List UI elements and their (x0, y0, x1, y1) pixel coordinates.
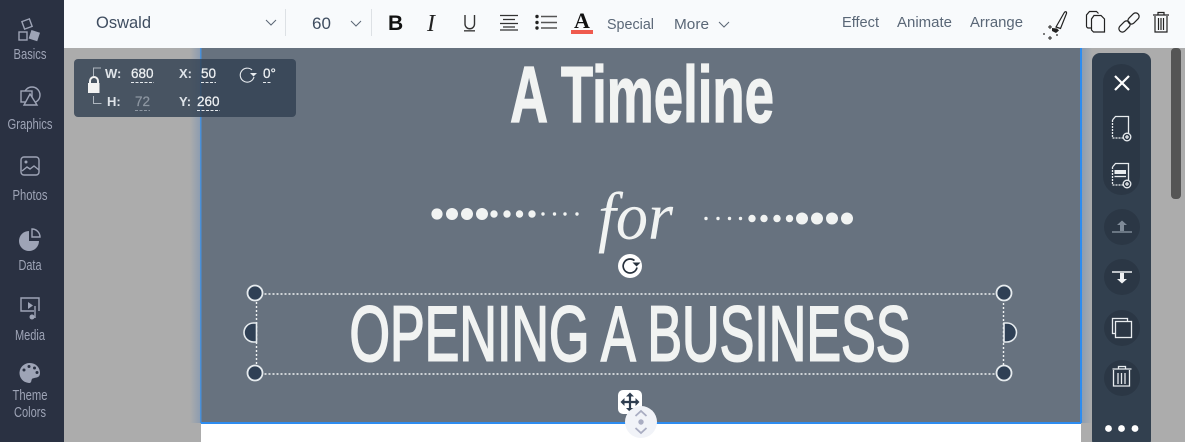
font size selector: 60 (312, 14, 331, 33)
button: move down (1104, 259, 1140, 295)
button: duplicate (1104, 310, 1140, 346)
text colour button (571, 8, 593, 34)
sidebar item: Photos (12, 157, 48, 204)
lock icon (88, 68, 102, 104)
font selector: Oswald (96, 13, 151, 32)
move handle (618, 390, 642, 414)
sidebar item: Data (18, 229, 42, 274)
text colour button: A (574, 8, 590, 33)
underline button (464, 15, 475, 32)
icon: trash (1153, 12, 1169, 32)
align centre button (500, 16, 518, 30)
more menu: More (674, 17, 709, 33)
top toolbar (64, 0, 1185, 48)
size and position readout panel: 0° (263, 66, 276, 81)
size and position readout panel: 50 (201, 66, 216, 81)
sidebar item: Graphics (8, 87, 52, 133)
icon: copy (1086, 12, 1104, 32)
size and position readout panel: W: (105, 66, 121, 81)
icon: magic brush (1043, 12, 1067, 40)
size and position readout panel (74, 59, 296, 117)
scrollbar (1171, 48, 1181, 199)
right action panel (1092, 53, 1151, 442)
font size selector (312, 14, 361, 33)
right dotted ornament (704, 212, 853, 224)
list button (535, 15, 557, 30)
size and position readout panel: X: (179, 66, 192, 81)
size and position readout panel: H: (107, 94, 121, 109)
sidebar item: Theme Colors: Colors (14, 404, 46, 421)
size and position readout panel: 72 (135, 94, 150, 109)
headline: OPENING A BUSINESS: OPENING A BUSINESS (350, 290, 910, 378)
canvas: slate artboard (190, 48, 1092, 442)
special menu: Special (607, 17, 654, 33)
sidebar item: Media (15, 298, 45, 344)
effect menu: Effect (842, 15, 879, 31)
more menu (674, 17, 729, 33)
more options dots (1105, 425, 1138, 432)
selection box with handles (244, 286, 1016, 380)
size and position readout panel: Y: (179, 94, 191, 109)
sidebar item: Graphics: Graphics (8, 116, 52, 133)
bold button: B (388, 12, 403, 35)
sidebar item: Theme Colors: Theme (12, 387, 48, 404)
size and position readout panel: 260 (197, 94, 220, 109)
sidebar item: Media: Media (15, 327, 45, 344)
sidebar item: Basics: Basics (14, 46, 46, 63)
button: delete (1104, 360, 1140, 396)
icon: duplicate page (1112, 164, 1131, 188)
font selector (96, 13, 276, 32)
script word: for: for (598, 178, 674, 254)
left sidebar (0, 0, 64, 442)
button: move up (disabled) (1104, 209, 1140, 245)
sidebar item: Theme Colors (12, 363, 48, 421)
icon: add blank page (1112, 116, 1131, 141)
size and position readout panel: 680 (131, 66, 154, 81)
animate menu: Animate (897, 15, 952, 31)
page resize knob (625, 406, 657, 438)
left dotted ornament (431, 208, 579, 220)
sidebar item: Photos: Photos (12, 187, 48, 204)
title: A Timeline: A Timeline (510, 50, 774, 139)
rotate handle (618, 254, 642, 278)
arrange menu: Arrange (970, 15, 1023, 31)
italic button: I (426, 11, 436, 37)
sidebar item: Data: Data (18, 257, 42, 274)
sidebar item: Basics (14, 19, 46, 63)
icon: link (1117, 11, 1141, 34)
icon: close (1115, 76, 1129, 90)
